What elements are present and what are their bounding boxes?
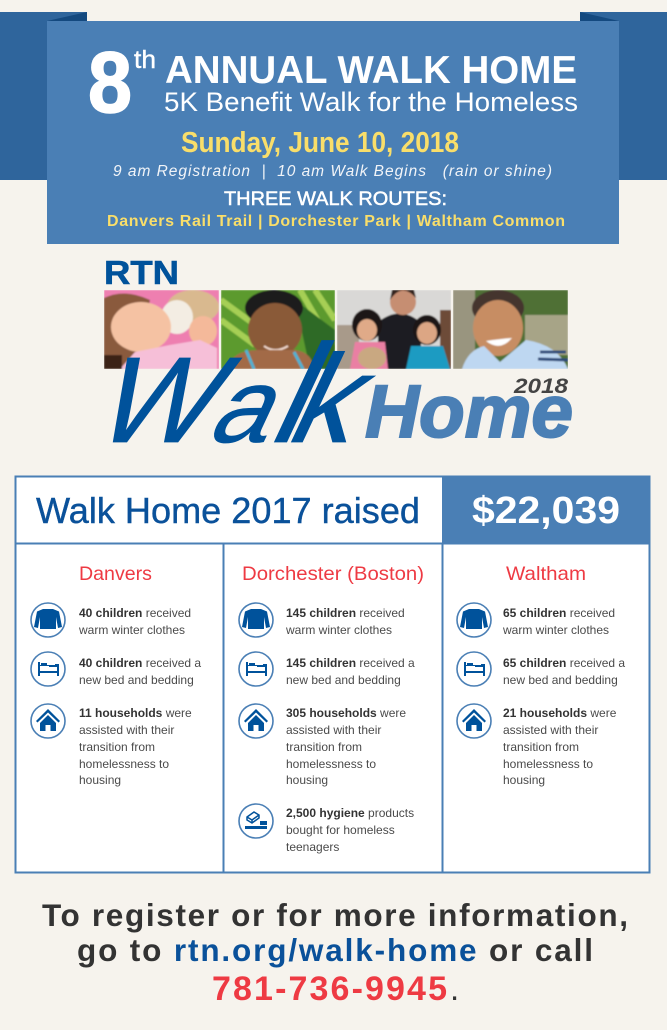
total raised: $22,039 (472, 490, 620, 532)
banner title: 8 (88, 35, 132, 131)
item: housing: housing (286, 773, 328, 787)
item: clothes: 65 children received (503, 606, 615, 620)
item: hygiene: teenagers (286, 840, 339, 854)
item: housing: housing (79, 773, 121, 787)
item: hygiene: bought for homeless (286, 823, 395, 837)
item: bed (31, 652, 201, 687)
footer call to action: 781-736-9945 (212, 970, 447, 1008)
item: housing: assisted with their (79, 723, 174, 737)
heading: Dorchester: Dorchester (Boston) (242, 563, 424, 585)
item: clothes (31, 603, 191, 637)
item: housing: assisted with their (286, 723, 381, 737)
item: housing: homelessness to (286, 757, 376, 771)
logo: Walk script: k (271, 329, 398, 469)
item: housing: 11 households were (79, 706, 192, 720)
item: clothes: 145 children received (286, 606, 405, 620)
item: hygiene: 2,500 hygiene products (286, 806, 414, 820)
logo: Walk script: a (194, 348, 308, 465)
heading: Waltham: Waltham (506, 563, 586, 585)
item: bed: new bed and bedding (286, 673, 401, 687)
routes heading: THREE WALK ROUTES: (224, 189, 447, 210)
banner title: ANNUAL WALK HOME (165, 49, 577, 92)
photo: smiling girl in green leaves (221, 290, 335, 369)
column: Dorchester (239, 563, 424, 854)
item: housing: transition from (286, 740, 362, 754)
photo: mother with two children (337, 289, 451, 369)
column: Danvers (31, 563, 201, 787)
logo: Home: Home (365, 370, 573, 453)
logo: RTN: RTN (104, 254, 179, 291)
item: housing: homelessness to (503, 757, 593, 771)
item: housing: 21 households were (503, 706, 617, 720)
footer call to action: . (450, 970, 459, 1007)
table heading: Walk Home 2017 raised (36, 490, 420, 531)
item: clothes: warm winter clothes (78, 623, 185, 637)
item: clothes: warm winter clothes (285, 623, 392, 637)
logo: Walk script: W (76, 333, 254, 469)
item: housing (31, 704, 192, 787)
item: clothes: 40 children received (79, 606, 191, 620)
item: housing: housing (503, 773, 545, 787)
photo: girl with teddy bear (104, 290, 219, 369)
routes list: Danvers Rail Trail | Dorchester Park | Waltham Common (107, 213, 565, 230)
item: bed: new bed and bedding (503, 673, 618, 687)
logo: year 2018: 2018 (513, 375, 568, 398)
item: housing: transition from (79, 740, 155, 754)
column: Waltham (457, 563, 625, 787)
footer call to action: To register or for more information, (42, 897, 628, 933)
item: housing: 305 households were (286, 706, 406, 720)
item: housing: homelessness to (79, 757, 169, 771)
logo: Walk script: l (251, 317, 355, 472)
item: hygiene (239, 804, 414, 854)
item: bed (457, 652, 625, 687)
banner ribbon left (0, 12, 87, 180)
results table frame (15, 476, 650, 873)
event times: 9 am Registration | 10 am Walk Begins (rain or shine) (113, 163, 552, 180)
event date: Sunday, June 10, 2018 (181, 127, 459, 159)
item: housing (457, 704, 617, 787)
footer call to action (42, 897, 628, 1008)
item: housing (239, 704, 406, 787)
footer call to action: go to rtn.org/walk-home or call (77, 932, 593, 968)
banner title: th (134, 46, 156, 74)
item: clothes (239, 603, 405, 637)
item: bed: 40 children received a (79, 656, 201, 670)
banner ribbon right (580, 12, 667, 180)
item: clothes (457, 603, 615, 637)
item: bed (239, 652, 415, 687)
banner title: 5K Benefit Walk for the Homeless (164, 87, 578, 117)
photo: smiling boy (453, 290, 568, 369)
item: bed: new bed and bedding (79, 673, 194, 687)
banner title (88, 35, 578, 131)
item: housing: transition from (503, 740, 579, 754)
item: clothes: warm winter clothes (502, 623, 609, 637)
item: bed: 145 children received a (286, 656, 415, 670)
item: housing: assisted with their (503, 723, 598, 737)
banner panel (47, 21, 619, 244)
heading: Danvers: Danvers (79, 563, 152, 585)
item: bed: 65 children received a (503, 656, 625, 670)
